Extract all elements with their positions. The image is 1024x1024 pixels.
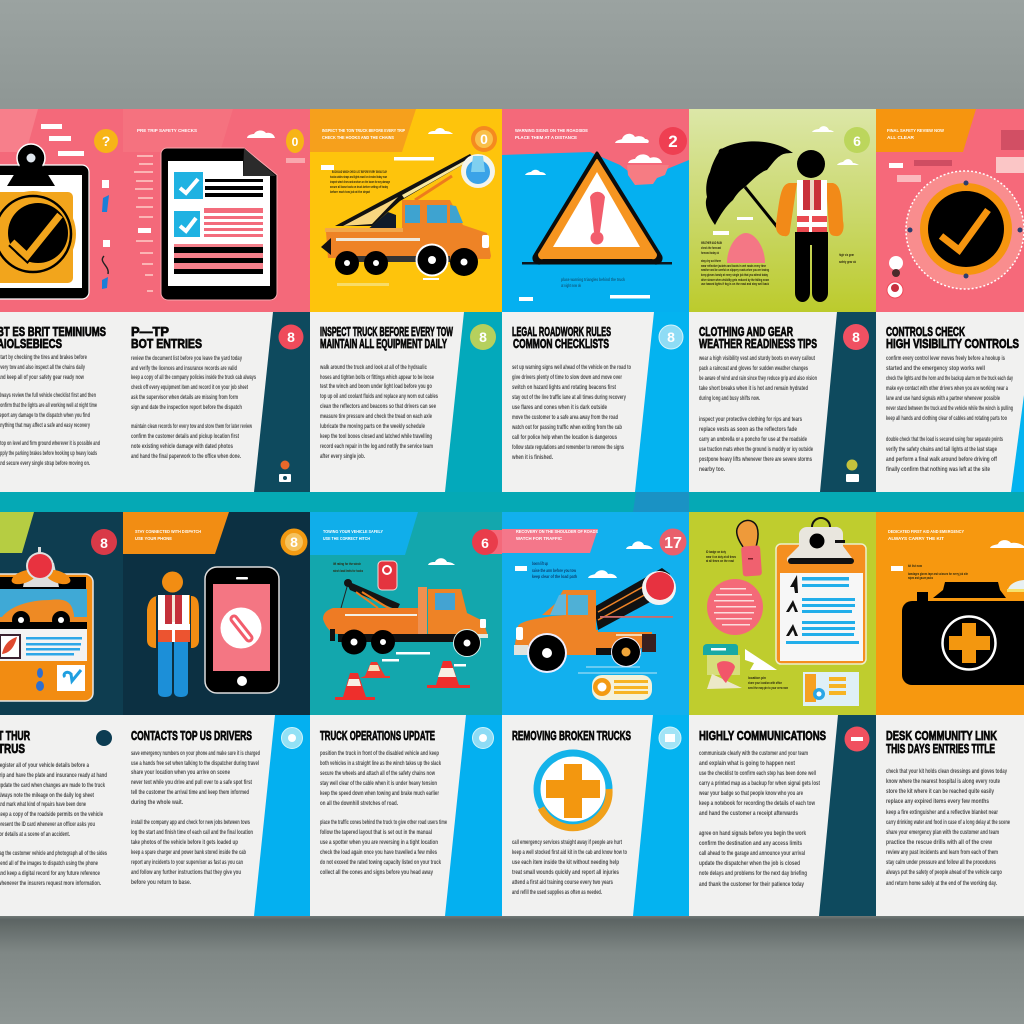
body text: present the ID card whenever an officer asks you <box>0 821 95 828</box>
clouds <box>713 126 859 235</box>
body text: communicate clearly with the customer and your team <box>699 750 808 757</box>
banner caption: WATCH FOR TRAFFIC <box>516 536 563 541</box>
caption: send the map pin to your crew now <box>748 685 789 690</box>
body text: keep the tool boxes closed and latched while travelling <box>320 433 432 440</box>
banner caption <box>322 128 405 140</box>
text card 3: MAINTAIN ALL EQUIPMENT DAILY <box>320 337 447 351</box>
panel 9: teal tow truck with cones <box>310 512 502 715</box>
body text: measure tire pressure and check the tread on each axle <box>320 413 432 420</box>
body text: update the card when changes are made to the truck <box>0 782 105 789</box>
caption: wipes and gauze packs <box>907 575 933 580</box>
text card 6: CONTROLS CHECK <box>886 325 965 339</box>
body text: place the traffic cones behind the truck to give other road users time <box>320 819 447 826</box>
panel 3: yellow crane truck: BOOM AND WINCH CHECK LIST BEFORE EVERY SINGLE DAY <box>332 169 387 174</box>
body text: keep a spare charger and power bank stored inside the cab <box>131 849 246 856</box>
caption: safety gear ok <box>839 259 856 264</box>
caption: ID badge on duty <box>706 549 726 554</box>
caption: high vis gear <box>839 252 854 257</box>
body text: keep a well stocked first aid kit in the cab and know how to <box>512 849 627 856</box>
text card 2: BOT ENTRIES <box>131 337 202 351</box>
body text: practice the rescue drills with all of the crew <box>886 839 993 846</box>
number badge <box>472 728 494 748</box>
body text: call ahead to the garage and announce your arrival <box>699 850 805 857</box>
body text: confirm the destination and any access limits <box>699 840 802 847</box>
body text: and hand the customer a receipt afterwards <box>699 810 798 817</box>
panel 6: pink check circle <box>876 109 1024 312</box>
icon: tow truck rear view <box>514 568 676 673</box>
text card 4: LEGAL ROADWORK RULES <box>512 325 611 339</box>
body text <box>698 750 821 888</box>
caption <box>321 165 390 194</box>
text card 11 <box>689 715 876 916</box>
body text: apply the parking brakes before hooking up heavy loads <box>0 450 97 457</box>
body text: follow state regulations and remember to remove the signs <box>512 444 624 451</box>
banner caption: USE YOUR PHONE <box>135 536 172 541</box>
body text: be aware of wind and rain since they reduce grip and also vision <box>699 375 817 382</box>
number badge <box>472 529 502 555</box>
body text <box>319 364 438 460</box>
body text: treat small wounds quickly and report all injuries <box>512 869 619 876</box>
body text: check off every equipment item and record it on your job sheet <box>131 384 248 391</box>
body text: call emergency services straight away if people are hurt <box>512 839 622 846</box>
body text: use the checklist to confirm each step has been done well <box>699 770 816 777</box>
body text: always review the full vehicle checklist first and then <box>0 392 96 399</box>
text card 10: REMOVING BROKEN TRUCKS <box>512 729 631 743</box>
caption: boom lift up <box>532 561 548 566</box>
banner caption: FINAL SAFETY REVIEW NOW <box>887 128 945 133</box>
body text: during long and busy shifts now. <box>699 395 760 402</box>
body text: use each item inside the kit without needing help <box>512 859 619 866</box>
number badge: ? <box>102 133 110 149</box>
panel 2: pink document <box>123 109 310 312</box>
body text: record each repair in the log and notify the service team <box>320 443 433 450</box>
icon: label tag <box>592 675 652 700</box>
banner caption: STAY CONNECTED WITH DISPATCH <box>135 529 201 534</box>
panel 3: yellow crane truck <box>310 109 502 312</box>
body text: wear a high visibility vest and sturdy boots on every callout <box>698 355 815 362</box>
body text: report any damage to the dispatch when you find <box>0 412 90 419</box>
body text: review the document list before you leave the yard today <box>131 355 242 362</box>
body text: position the truck in front of the disabled vehicle and keep <box>320 750 439 757</box>
body text: report any incidents to your supervisor as fast as you can <box>131 859 243 866</box>
icon: clipboard with check badge <box>0 144 89 299</box>
body text: note delays and problems for the next day briefing <box>699 870 807 877</box>
body text: log the start and finish time of each call and the final location <box>131 829 253 836</box>
number badge: 8 <box>290 534 298 550</box>
body text: install the company app and check for new jobs between tows <box>131 819 250 826</box>
panel 4: blue warning triangle <box>502 109 689 312</box>
banner caption: TOWING YOUR VEHICLE SAFELY <box>323 529 383 534</box>
cloud <box>428 128 453 134</box>
number badge: 0 <box>480 131 488 147</box>
icon: vehicle ID clipboard <box>0 547 93 701</box>
body text: and keep a digital record for any future reference <box>0 870 100 877</box>
body text: lubricate the moving parts on the weekly schedule <box>320 423 425 430</box>
body text <box>131 355 256 460</box>
banner caption: PLACE THEM AT A DISTANCE <box>515 135 577 140</box>
text card 4: COMMON CHECKLISTS <box>513 337 609 351</box>
caption <box>532 561 577 579</box>
body text: confirm that the lights are all working well at night time <box>0 402 97 409</box>
body text: every tow and also inspect all the chains daily <box>0 364 85 371</box>
caption: bandages gloves tape and scissors for every job site <box>908 571 968 576</box>
number badge <box>660 528 686 556</box>
body text: trip and have the plate and insurance ready at hand <box>0 772 107 779</box>
body text <box>511 364 631 461</box>
body text: watch out for passing traffic when exiting from the cab <box>511 424 622 431</box>
icon: check badge <box>906 171 1024 289</box>
text card 2: P—TP <box>131 325 169 339</box>
number badge: 6 <box>853 133 861 149</box>
cloud <box>247 130 275 138</box>
caption <box>748 675 789 690</box>
body text: do not exceed the rated towing capacity listed on your truck <box>320 859 441 866</box>
caption: place warning triangles behind the truck <box>561 277 625 282</box>
body text: follow the tapered layout that is set out in the manual <box>320 829 432 836</box>
number badge <box>96 730 112 746</box>
banner caption <box>888 529 964 541</box>
body text: use traction mats when the ground is muddy or icy outside <box>699 446 813 453</box>
body text: secure the wheels and attach all of the safety chains now <box>320 770 436 777</box>
panel 10: blue tow truck <box>502 512 689 715</box>
icon: pink note circle <box>707 579 763 635</box>
body text: never text while you drive and pull over to a safe spot first <box>131 779 253 786</box>
number badge: 17 <box>664 535 682 552</box>
text card 4 <box>502 312 689 492</box>
body text: keep a copy of all the company policies inside the truck cab always <box>131 374 256 381</box>
body text: and keep all of your safety gear ready now <box>0 374 85 381</box>
banner caption: CHECK THE HOOKS AND THE CHAINS <box>322 135 394 140</box>
body text: and refill the used supplies as often as needed. <box>512 889 602 896</box>
body text: on all the downhill stretches of road. <box>320 800 398 807</box>
body text: attend a first aid training course every two years <box>512 879 613 886</box>
panel 12: orange first aid kit <box>876 512 1024 715</box>
body text <box>512 839 627 896</box>
text card 2 <box>123 312 310 492</box>
body text: start by checking the tires and brakes before <box>0 354 87 361</box>
body text: carry an umbrella or a poncho for use at the roadside <box>699 436 807 443</box>
number badge <box>471 126 497 152</box>
small icons <box>846 460 859 482</box>
body text: keep a notebook for recording the details of each tow <box>699 800 816 807</box>
body text: stop on level and firm ground wherever it is possible and <box>0 440 100 447</box>
body text: clean the reflectors and beacons so that drivers can see <box>320 403 436 410</box>
panel 5: lime worker with umbrella <box>689 109 876 312</box>
body text: replace any expired items every few months <box>886 798 989 805</box>
caption: weather and be careful on slippery roads when you are towing <box>700 267 769 272</box>
body text <box>0 762 107 887</box>
body text: started and the emergency stop works well <box>886 365 985 372</box>
icon: medical plus <box>537 753 609 828</box>
number badge <box>282 728 302 748</box>
panel 11: lime clipboard collage <box>689 512 876 715</box>
caption: before each tow job at the depot <box>330 189 370 194</box>
banner caption <box>135 529 201 541</box>
icon: worker <box>147 572 199 697</box>
caption: drive slower when visibility gets reduced by the falling snow <box>701 277 770 282</box>
text card 6 <box>876 312 1024 492</box>
text card 9 <box>310 715 502 916</box>
body text <box>320 750 447 876</box>
number badge <box>286 129 304 153</box>
number badge <box>91 529 117 555</box>
body text: top up oil and coolant fluids and replace any worn out cables <box>320 393 438 400</box>
side notes <box>889 130 1024 182</box>
caption: secure all loose tools on truck before setting off today <box>330 184 388 189</box>
icon: map pin card <box>703 644 777 689</box>
number badge <box>94 129 118 153</box>
body text: take photos of the vehicle before it gets loaded up <box>131 839 238 846</box>
text card 3 <box>310 312 502 492</box>
body text: before you return to base. <box>131 879 191 886</box>
body text: whenever the insurers request more information. <box>0 880 101 887</box>
cloud <box>990 540 1024 548</box>
body text: check the load again once you have travelled a few miles <box>320 849 437 856</box>
body text: use a spotter when you are reversing in a tight location <box>320 839 438 846</box>
text card 9: TRUCK OPERATIONS UPDATE <box>320 729 435 743</box>
banner caption: WARNING SIGNS ON THE ROADSIDE <box>515 128 588 133</box>
body text: confirm the customer details and pickup location first <box>131 433 240 440</box>
body text: save emergency numbers on your phone and make sure it is charged <box>131 750 260 757</box>
caption: at night now ok <box>561 283 581 288</box>
number badge: 8 <box>852 329 860 345</box>
caption: keep gloves handy at every single job that you attend today <box>701 272 768 277</box>
text card 5: WEATHER READINESS TIPS <box>699 337 817 351</box>
icon: dash marks <box>41 124 84 156</box>
number badge <box>844 726 870 752</box>
text card 12 <box>876 715 1024 916</box>
caption: lift rating for the winch <box>333 561 361 566</box>
body text: send all of the images to dispatch using the phone <box>0 860 98 867</box>
banner caption: ALL CLEAR <box>887 135 915 140</box>
icon: traffic cones <box>335 661 470 700</box>
body text: call for police help when the location is dangerous <box>512 434 617 441</box>
body text: ask the supervisor when details are missing from form <box>131 394 238 401</box>
text card 8: CONTACTS TOP US DRIVERS <box>131 729 252 743</box>
icon: side pins <box>102 180 110 289</box>
body text: sign and date the inspection report before the dispatch <box>131 404 242 411</box>
body text <box>698 355 817 473</box>
clouds <box>519 134 662 301</box>
caption <box>891 563 968 580</box>
body text: update the dispatcher when the job is closed <box>699 860 800 867</box>
icon: worker in safety vest <box>776 150 844 302</box>
body text: nearby too. <box>699 466 725 473</box>
teal divider strip <box>0 490 1024 514</box>
body text: and thank the customer for their patience today <box>699 881 804 888</box>
body text: wear your badge so that people know who you are <box>698 790 803 797</box>
number badge: 0 <box>292 135 299 149</box>
banner caption: DEDICATED FIRST AID AND EMERGENCY <box>888 529 964 534</box>
banner caption <box>887 128 945 140</box>
icon: checklist document <box>161 148 277 300</box>
body text: switch on hazard lights and rotating beacons first <box>512 384 617 391</box>
caption: WEATHER AND RAIN <box>701 240 722 245</box>
icon: lanyard tag <box>737 520 762 577</box>
icon: colorful map card <box>803 672 859 706</box>
body text: test the winch and boom under light load before you go <box>320 383 432 390</box>
icon: tow truck <box>323 579 488 662</box>
body text: inspect your protective clothing for rips and tears <box>699 416 802 423</box>
side text scribble <box>134 155 153 292</box>
text card 8 <box>123 715 310 916</box>
text card 3: INSPECT TRUCK BEFORE EVERY TOW <box>320 325 453 339</box>
body text: use flares and cones when it is dark outside <box>512 404 607 411</box>
body text: give drivers plenty of time to slow down and move over <box>512 374 622 381</box>
panel 1: pink clipboard <box>0 109 124 312</box>
icon: hook sign <box>378 561 397 590</box>
banner caption: ALWAYS CARRY THE KIT <box>888 536 944 541</box>
body text: during the whole wait. <box>131 799 183 806</box>
icon: umbrella <box>706 141 793 228</box>
body text: stay well clear of the cable when it is under heavy tension <box>320 780 437 787</box>
text card 10 <box>502 715 689 916</box>
number badge <box>470 324 496 350</box>
body text: and follow any further instructions that they give you <box>131 869 241 876</box>
number badge <box>659 127 687 155</box>
number badge: 2 <box>668 132 678 151</box>
banner caption <box>515 128 588 140</box>
body text: pack a raincoat and gloves for sudden weather changes <box>699 365 808 372</box>
icon: main clipboard <box>776 518 866 664</box>
body text: always note the mileage on the daily log sheet <box>0 792 95 799</box>
small pins <box>887 256 903 298</box>
banner caption: USE THE CORRECT HITCH <box>323 536 370 541</box>
caption: at all times on the road <box>706 558 734 563</box>
caption <box>700 240 856 286</box>
caption: hooks cables straps and lights must be checked today now <box>330 174 387 179</box>
cloud <box>428 558 455 565</box>
body text: keep a copy of the roadside permits on the vehicle <box>0 811 103 818</box>
caption: location pin <box>748 675 766 680</box>
banner caption <box>516 529 598 541</box>
banner caption: PRE TRIP SAFETY CHECKS <box>137 128 197 133</box>
icon: warning triangle <box>522 153 672 264</box>
body text: take short breaks when it is hot and remain hydrated <box>699 385 808 392</box>
body text: maintain clean records for every tow and store them for later review <box>131 423 252 430</box>
text card 1 <box>0 312 124 492</box>
body text: tag the customer vehicle and photograph all of the sides <box>0 850 107 857</box>
icon: crane tow truck <box>321 154 495 286</box>
body text: both vehicles in a straight line as the winch takes up the slack <box>320 760 441 767</box>
body text: note existing vehicle damage with dated photos <box>131 443 233 450</box>
body text: after every single job. <box>320 453 365 460</box>
number badge: 6 <box>481 535 489 551</box>
number badge: 8 <box>100 535 108 551</box>
body text: use a hands free set when talking to the dispatcher during travel <box>131 760 259 767</box>
text card 1: BT ES BRIT TEMINIUMS <box>0 325 106 339</box>
icon: pink dome <box>727 233 765 263</box>
icon: first aid kit <box>902 580 1024 685</box>
body text: agree on hand signals before you begin the work <box>699 830 806 837</box>
caption: wear it on duty at all times <box>705 554 736 559</box>
text card 5 <box>689 312 876 492</box>
body text: set up warning signs well ahead of the vehicle on the road to <box>512 364 631 371</box>
caption: raise the arm before you tow <box>532 568 576 573</box>
body text: and verify the licences and insurance records are valid <box>131 365 237 372</box>
number badge <box>844 127 870 153</box>
caption <box>705 549 736 563</box>
body text <box>0 354 100 467</box>
caption <box>561 277 625 288</box>
caption: stay dry out there <box>701 258 721 263</box>
body text: stay out of the live traffic lane at all times during recovery <box>512 394 626 401</box>
caption: inspect winch lines and anchors on the boom for any damage <box>330 179 390 184</box>
body text: and explain what is going to happen next <box>699 760 796 767</box>
caption: wear reflective jackets and boots in wet roads every time <box>700 263 766 268</box>
number badge <box>280 528 308 556</box>
number badge: 8 <box>667 329 675 345</box>
body text <box>886 355 1013 473</box>
number badge: 8 <box>287 329 295 345</box>
body text: anything that may affect a safe and easy recovery <box>0 422 90 429</box>
body text: share your location when you arrive on scene <box>131 769 230 776</box>
number badge <box>843 324 869 350</box>
panel 7: dark clipboard <box>0 512 124 715</box>
caption <box>332 561 363 573</box>
body text: walk around the truck and look at all of the hydraulic <box>319 364 427 371</box>
small icons <box>279 460 291 482</box>
body text: collect all the cones and signs before you head away <box>320 869 433 876</box>
body text: carry a printed map as a backup for when signal gets lost <box>699 780 821 787</box>
body text: move the customer to a safe area away from the road <box>512 414 618 421</box>
body text: when it is finished. <box>511 454 553 461</box>
caption: check the forecast <box>701 245 721 250</box>
body text: hoses and tighten bolts or fittings which appear to be loose <box>320 374 434 381</box>
caption: winch load limits for hooks <box>332 568 363 573</box>
caption: keep clear of the load path <box>532 574 577 579</box>
text card 7 <box>0 715 124 916</box>
banner caption: RECOVERY ON THE SHOULDER OF ROADS <box>516 529 598 534</box>
text card 11: HIGHLY COMMUNICATIONS <box>699 729 826 743</box>
body text: and mark what kind of repairs have been done <box>0 801 86 808</box>
banner caption: INSPECT THE TOW TRUCK BEFORE EVERY TRIP <box>322 128 405 133</box>
body text <box>886 768 1010 887</box>
panel 8: dark worker with phone <box>123 512 310 715</box>
number badge <box>659 325 683 349</box>
body text: and hand the final paperwork to the office when done. <box>131 453 241 460</box>
caption: forecast today ok <box>701 250 719 255</box>
body text: for details at a scene of an accident. <box>0 831 70 838</box>
clouds <box>515 541 653 578</box>
banner caption <box>323 529 383 541</box>
number badge <box>659 727 681 749</box>
body text: keep the speed down when towing and brake much earlier <box>320 790 439 797</box>
number badge <box>278 324 304 350</box>
body text: register all of your vehicle details before a <box>0 762 89 769</box>
body text: tell the customer the arrival time and keep them informed <box>131 789 249 796</box>
text card 5: CLOTHING AND GEAR <box>699 325 793 339</box>
caption: use hazard lights if fog is on the road and stay well back <box>701 281 769 286</box>
caption: kit list now <box>908 563 923 568</box>
body text: and secure every single strap before moving on. <box>0 460 90 467</box>
body text: postpone heavy lifts whenever there are severe storms <box>699 456 812 463</box>
body text: replace vests as soon as the reflectors fade <box>699 426 797 433</box>
number badge: 8 <box>479 329 487 345</box>
body text <box>131 750 260 886</box>
caption: share your location with office <box>748 680 782 685</box>
icon: phone <box>205 567 279 693</box>
